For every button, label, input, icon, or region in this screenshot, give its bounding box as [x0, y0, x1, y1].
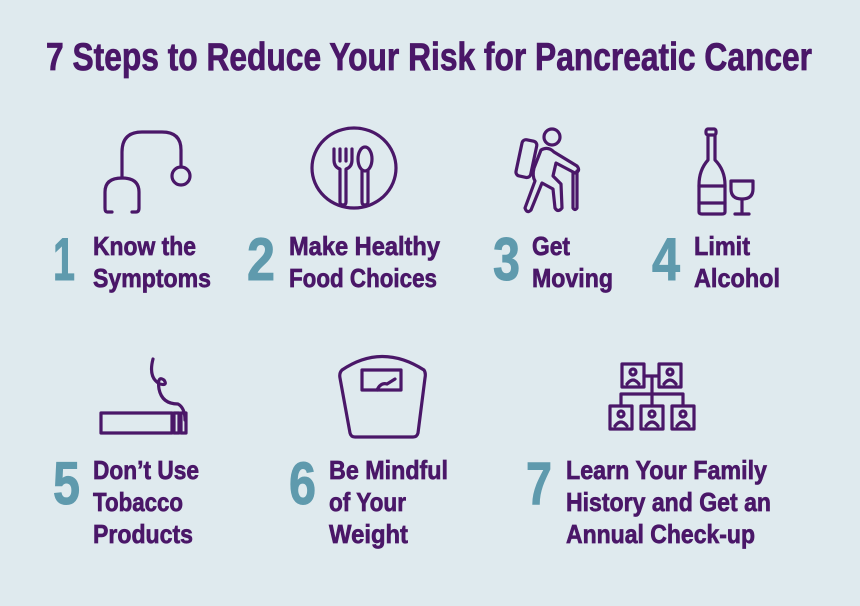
icon: plate with fork and spoon: [312, 128, 396, 208]
step 4: Limit: [694, 231, 750, 261]
step 1: [53, 226, 211, 293]
step 6: Weight: [329, 519, 408, 549]
step 2: Make Healthy: [289, 231, 440, 261]
step 7: Learn Your Family: [566, 455, 767, 485]
step 6: of Your: [329, 487, 406, 517]
step 5: Tobacco: [93, 487, 183, 517]
step 5: Don’t Use: [93, 455, 199, 485]
icon: weight scale: [340, 356, 425, 437]
step 4: 4: [652, 226, 681, 293]
step 7: 7: [526, 450, 552, 517]
step 2: Food Choices: [289, 263, 437, 293]
step 7: Annual Check-up: [566, 519, 755, 549]
step 1: 1: [53, 226, 75, 293]
step 3: Moving: [532, 263, 613, 293]
icon: family tree: [610, 364, 694, 429]
step 7: [526, 450, 771, 549]
step 2: [247, 226, 440, 293]
icon: stethoscope: [105, 132, 190, 212]
step 7: History and Get an: [566, 487, 771, 517]
step 1: Know the: [93, 231, 196, 261]
step 5: Products: [93, 519, 193, 549]
icon: cigarette: [101, 359, 186, 433]
step 6: Be Mindful: [329, 455, 448, 485]
step 6: [289, 450, 448, 549]
step 6: 6: [289, 450, 316, 517]
step 5: 5: [53, 450, 80, 517]
step 2: 2: [247, 226, 275, 293]
step 3: [493, 226, 613, 293]
step 3: Get: [532, 231, 570, 261]
step 3: 3: [493, 226, 520, 293]
step 5: [53, 450, 199, 549]
icon: hiker: [515, 129, 579, 212]
icon: bottle and glass: [699, 129, 753, 214]
step 4: [652, 226, 780, 293]
step 4: Alcohol: [694, 263, 780, 293]
step 1: Symptoms: [93, 263, 211, 293]
